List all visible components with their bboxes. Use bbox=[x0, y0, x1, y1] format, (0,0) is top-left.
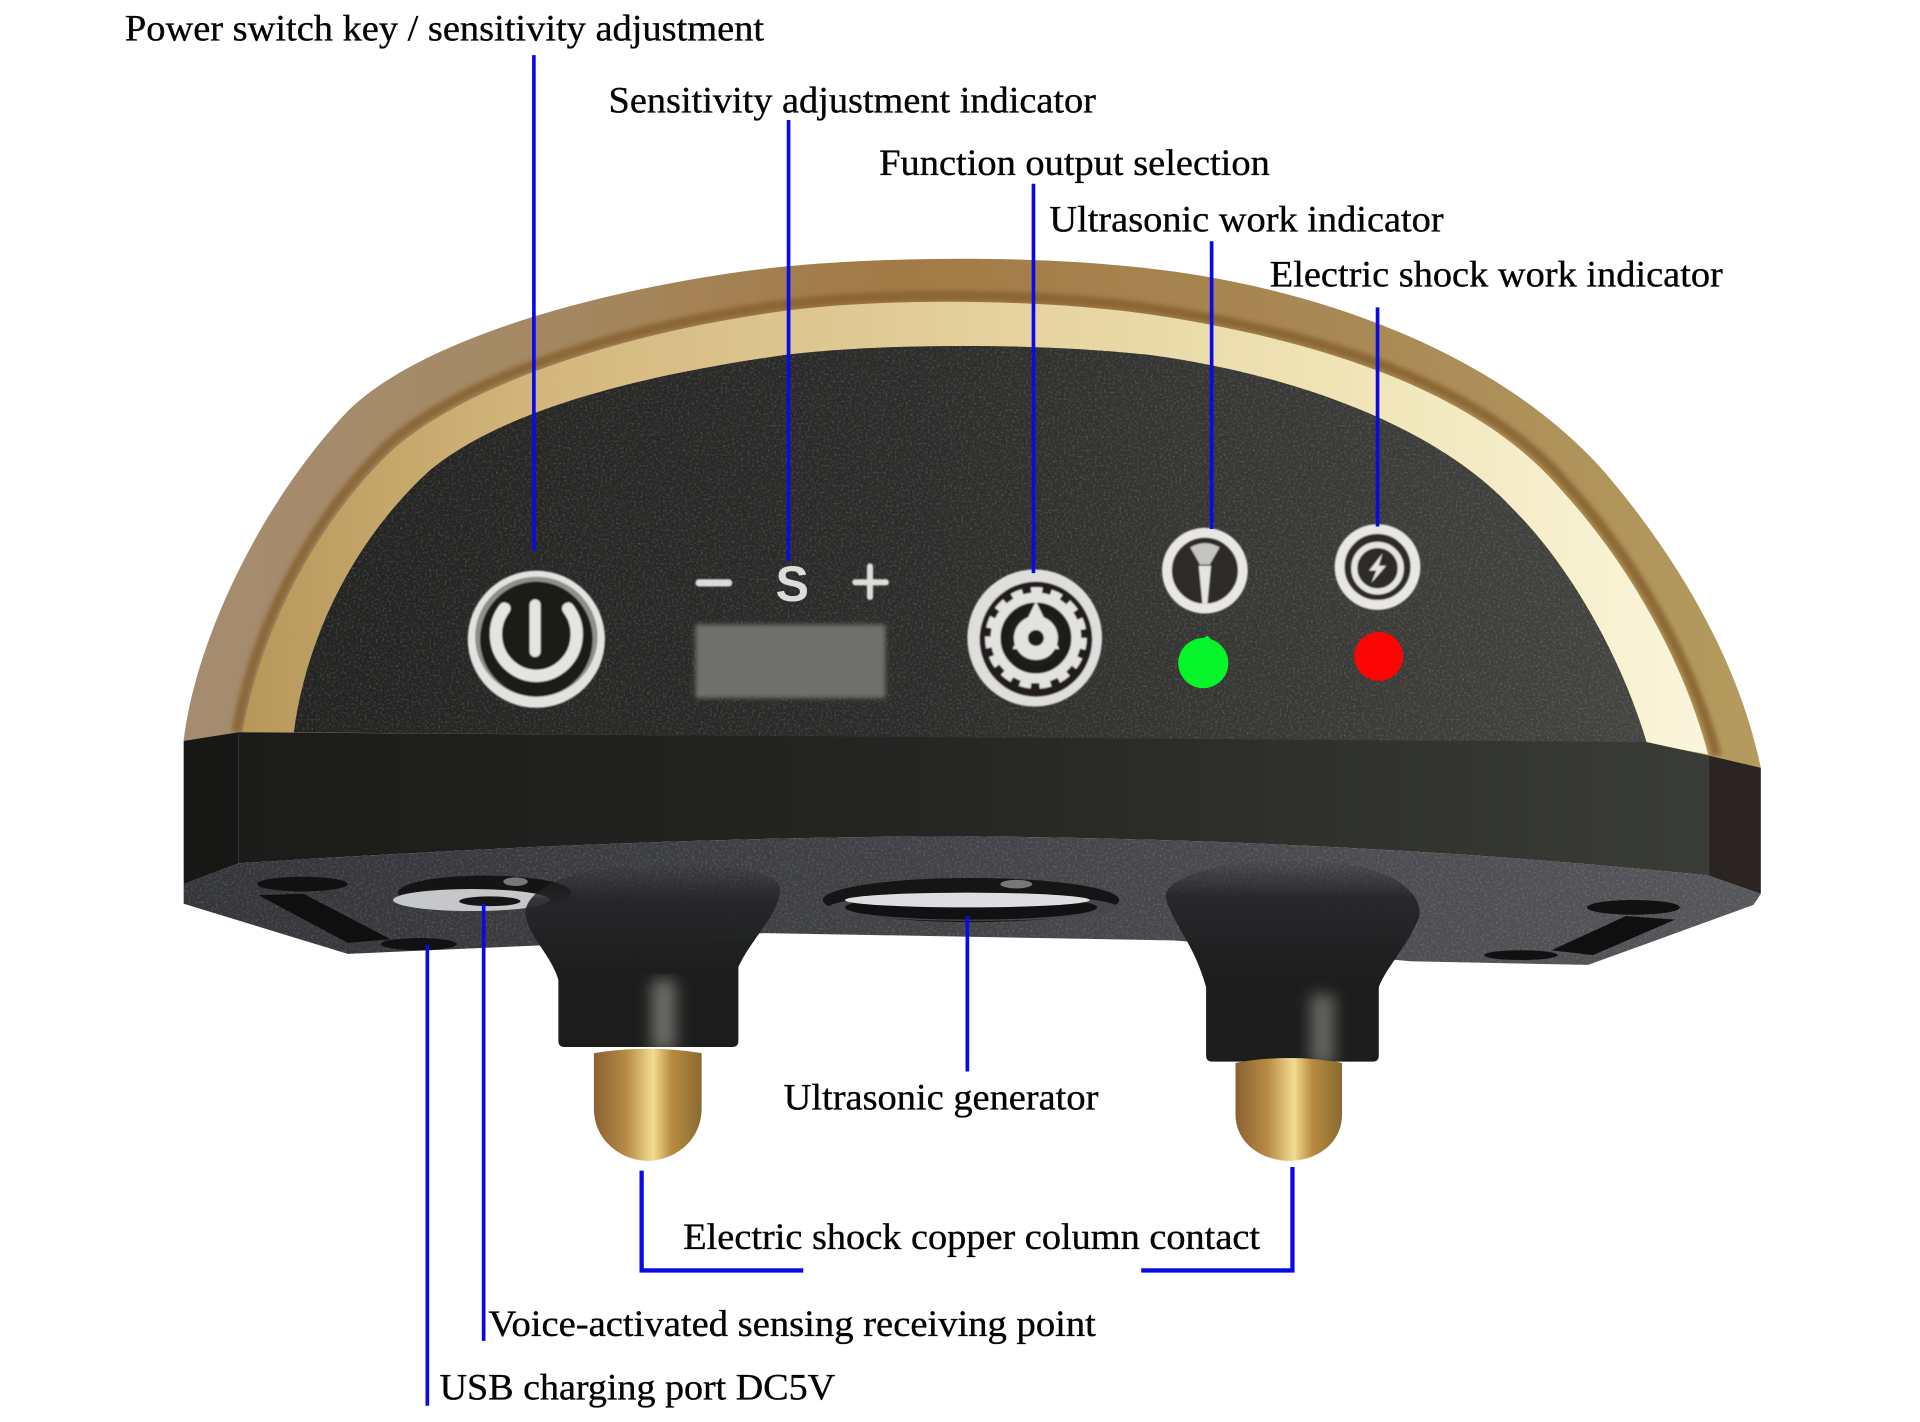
icon: electric shock indicator bbox=[1340, 529, 1416, 605]
sensitivity S: S bbox=[776, 556, 809, 612]
callout: sensitivity indicator: Sensitivity adjustment indicator bbox=[609, 80, 1096, 121]
icon: function gear button bbox=[967, 569, 1102, 707]
vent slot left bbox=[258, 894, 391, 943]
underside texture bbox=[184, 833, 1763, 967]
callout: function selection: Function output selection bbox=[879, 142, 1270, 183]
top panel bbox=[294, 346, 1647, 743]
shell groove bbox=[236, 296, 1717, 756]
icon: power button bbox=[468, 571, 605, 708]
device: collar receiver bbox=[184, 259, 1763, 1161]
neck highlight bbox=[651, 980, 676, 1051]
left end strip bbox=[184, 732, 239, 884]
left contact post bbox=[525, 865, 780, 1161]
right contact post bbox=[1166, 860, 1419, 1161]
red LED bbox=[1354, 632, 1403, 681]
neck highlight bbox=[1310, 994, 1335, 1065]
vent slot right bbox=[1551, 916, 1675, 955]
callout: copper column contact: Electric shock copper column contact bbox=[683, 1216, 1260, 1257]
mount hole left bbox=[257, 877, 348, 891]
cream inner band bbox=[242, 302, 1708, 754]
mount hole right bbox=[1587, 900, 1680, 915]
voice sensing recess bbox=[393, 876, 572, 911]
panel texture bbox=[282, 343, 1653, 747]
callout: USB charging port: USB charging port DC5V bbox=[440, 1367, 836, 1408]
USB charging port bbox=[381, 938, 457, 950]
front face band bbox=[239, 732, 1708, 876]
callout: power switch: Power switch key / sensitivity adjustment bbox=[125, 7, 764, 48]
callout: voice sensing point: Voice-activated sensing receiving point bbox=[489, 1303, 1096, 1344]
right end strip bbox=[1708, 756, 1761, 894]
underside bbox=[184, 836, 1761, 965]
sensitivity indicator window bbox=[696, 625, 885, 698]
sensitivity minus bbox=[696, 579, 732, 587]
green LED bbox=[1178, 636, 1228, 688]
sensitivity plus bbox=[852, 563, 889, 600]
callout: ultrasonic indicator: Ultrasonic work indicator bbox=[1049, 198, 1444, 239]
callout: copper column contact bbox=[642, 1167, 1292, 1270]
left copper contact bbox=[594, 1049, 702, 1161]
ultrasonic generator opening bbox=[823, 878, 1119, 922]
gold outer shell bbox=[184, 259, 1761, 768]
callout: electric shock indicator: Electric shock work indicator bbox=[1270, 254, 1723, 295]
icon: ultrasonic indicator bbox=[1167, 533, 1243, 609]
callout: ultrasonic generator: Ultrasonic generator bbox=[784, 1076, 1098, 1117]
small hole right bbox=[1484, 950, 1558, 960]
right copper contact bbox=[1236, 1058, 1342, 1161]
